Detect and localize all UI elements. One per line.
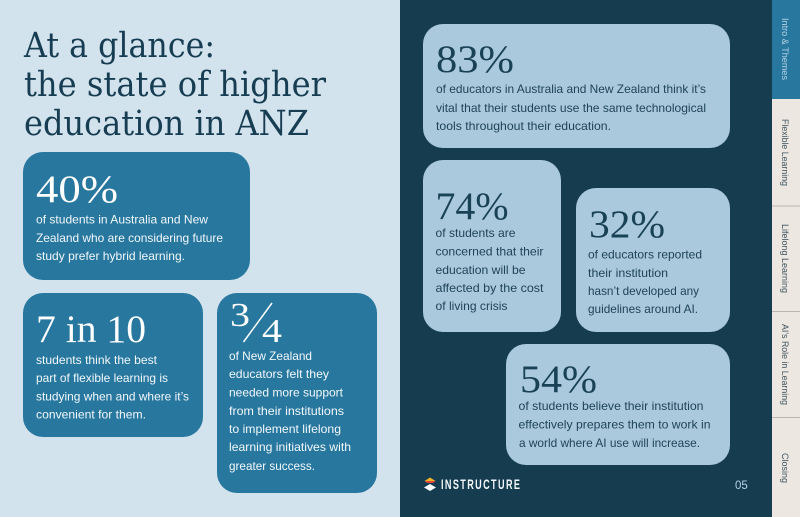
title: the state of higher xyxy=(24,65,326,105)
panel: 40% stat: Zealand who are considering future xyxy=(36,231,223,245)
page number: 05 xyxy=(735,480,748,492)
panel: 40% stat: of students in Australia and New xyxy=(36,212,208,226)
panel: 74% stat: 74% xyxy=(436,184,508,228)
tab: AI's Role in Learning: AI’s Role in Learning xyxy=(779,324,790,405)
panel: 32% stat: 32% xyxy=(589,202,665,246)
panel: 3/4 stat: educators felt they xyxy=(229,367,329,381)
panel: 32% stat xyxy=(576,188,730,332)
panel: 3/4 stat: 4 xyxy=(262,313,282,350)
panel: 32% stat: hasn’t developed any xyxy=(588,284,699,298)
panel: 7 in 10 stat: convenient for them. xyxy=(36,408,146,422)
panel: 83% stat: vital that their students use the same technological xyxy=(436,101,706,115)
navigation sidebar xyxy=(772,0,800,517)
panel: 7 in 10 stat: students think the best xyxy=(36,353,158,367)
panel: 54% stat: of students believe their institution xyxy=(518,399,704,413)
tab: Intro & Themes: Intro & Themes xyxy=(779,18,790,80)
panel: 3/4 stat: learning initiatives with xyxy=(229,440,351,454)
panel: 3/4 stat: 3 xyxy=(230,297,250,334)
logo: Instructure: INSTRUCTURE xyxy=(441,476,520,493)
panel: 32% stat: guidelines around AI. xyxy=(588,302,698,316)
panel: 74% stat xyxy=(423,160,561,332)
panel: 83% stat: 83% xyxy=(436,37,514,81)
panel: 74% stat: of students are xyxy=(436,226,516,240)
panel: 83% stat: of educators in Australia and New Zealand think it’s xyxy=(436,82,706,96)
panel: 54% stat xyxy=(506,344,730,465)
panel: 7 in 10 stat: part of flexible learning is xyxy=(36,371,168,385)
title: At a glance: xyxy=(23,26,215,66)
panel: 3/4 stat: needed more support xyxy=(229,386,344,400)
tab: Lifelong Learning: Lifelong Learning xyxy=(779,224,790,293)
title xyxy=(23,26,326,144)
title: education in ANZ xyxy=(24,104,309,144)
panel: 32% stat: their institution xyxy=(588,266,668,280)
right dark panel xyxy=(400,0,772,517)
panel: 3/4 stat: greater success. xyxy=(229,459,315,473)
panel: 83% stat: tools throughout their education. xyxy=(436,119,611,133)
panel: 32% stat: of educators reported xyxy=(588,248,702,262)
panel: 3/4 stat: from their institutions xyxy=(229,404,344,418)
panel: 3/4 stat: to implement lifelong xyxy=(229,422,341,436)
panel: 74% stat: of living crisis xyxy=(436,299,508,313)
panel: 7 in 10 stat: 7 in 10 xyxy=(36,307,146,351)
panel: 7 in 10 stat: studying when and where it’s xyxy=(36,390,189,404)
panel: 7 in 10 stat xyxy=(23,293,203,437)
panel: 74% stat: education will be xyxy=(436,263,526,277)
panel: 54% stat: 54% xyxy=(520,357,597,401)
panel: 74% stat: affected by the cost xyxy=(436,281,544,295)
panel: 40% stat: study prefer hybrid learning. xyxy=(36,249,185,263)
panel: 54% stat: a world where AI use will increase. xyxy=(519,436,700,450)
tab: Closing: Closing xyxy=(779,453,790,483)
panel: 40% stat xyxy=(23,152,250,280)
panel: 3/4 stat xyxy=(217,293,377,493)
tab: Flexible Learning: Flexible Learning xyxy=(779,119,790,186)
left background panel xyxy=(0,0,400,517)
panel: 40% stat: 40% xyxy=(36,167,118,211)
panel: 74% stat: concerned that their xyxy=(436,244,544,258)
panel: 3/4 stat: of New Zealand xyxy=(229,349,312,363)
panel: 54% stat: effectively prepares them to work in xyxy=(518,418,710,432)
panel: 83% stat xyxy=(423,24,730,148)
